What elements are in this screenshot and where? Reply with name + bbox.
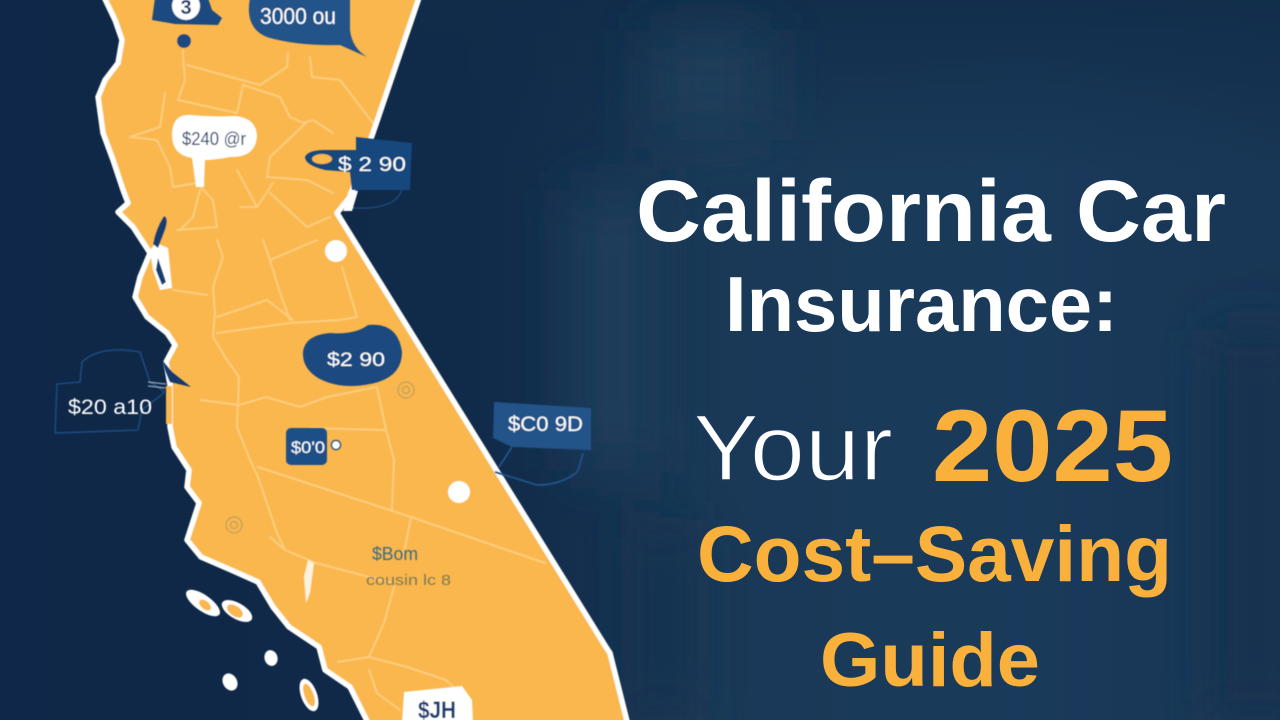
map: state fill with white outline <box>98 0 628 720</box>
map of California <box>98 0 628 720</box>
callout: small blue label <box>286 428 340 465</box>
marker: white dot north <box>325 240 347 262</box>
map label text: cousin lc 8 <box>366 572 451 589</box>
callout: small blue label: $0'0 <box>291 438 325 457</box>
title: Insurance: Insurance: <box>725 260 1118 348</box>
title: California Car: California Car <box>636 163 1226 260</box>
marker: white dot south <box>448 481 470 503</box>
callout: top-left badge <box>152 0 222 25</box>
subtitle: Cost-Saving: Cost–Saving <box>697 509 1172 598</box>
callout: right outlined bubble <box>493 402 591 485</box>
callout: central blob <box>303 325 402 386</box>
map label text: $Bom <box>372 544 418 564</box>
callout: left outlined label <box>55 350 191 433</box>
callout: white bubble: $240 @r <box>182 129 246 149</box>
marker: blue dot <box>177 34 191 48</box>
subtitle: Guide: Guide <box>820 618 1040 703</box>
callout: top price bubble <box>249 0 367 57</box>
callout: bottom white box <box>402 686 473 720</box>
marker: tan ring north <box>398 382 414 398</box>
map: small white inlet <box>304 560 314 603</box>
callout: central blob: $2 90 <box>327 350 385 371</box>
callout: right price tag <box>305 137 412 211</box>
islands <box>182 585 322 714</box>
map label text <box>366 544 451 589</box>
callout: left outlined label: $20 a10 <box>68 396 152 419</box>
callout: top price bubble: 3000 ou <box>260 3 336 29</box>
callout: right price tag: $ 2 90 <box>338 154 406 176</box>
map: dark bay <box>153 216 167 285</box>
marker: tan ring south <box>226 517 242 533</box>
callout: white bubble <box>172 115 257 187</box>
subtitle: Your: Your <box>693 395 893 500</box>
subtitle: 2025: 2025 <box>932 389 1173 503</box>
map: county lines <box>130 50 545 710</box>
callouts <box>55 0 591 720</box>
title block <box>636 163 1226 703</box>
map: coast section without outline <box>166 386 172 424</box>
map: bay with white inlet <box>150 243 172 290</box>
callout: right outlined bubble: $C0 9D <box>508 413 583 436</box>
